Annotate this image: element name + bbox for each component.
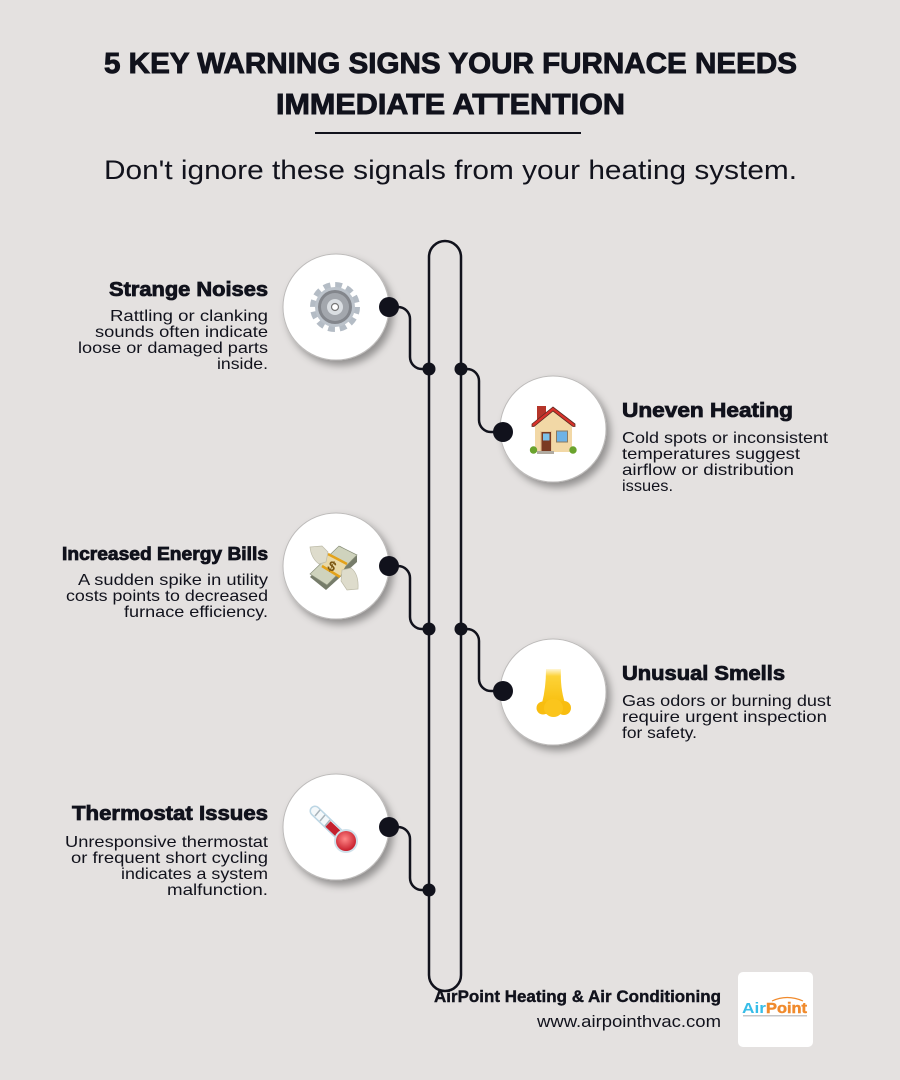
junction dot — [422, 884, 436, 896]
footer company name: AirPoint Heating & Air Conditioning — [434, 987, 721, 1006]
text: uneven heating description: airflow or distribution — [622, 462, 794, 479]
icon circle: thermometer — [283, 774, 389, 880]
logo — [738, 972, 813, 1047]
text: uneven heating description: temperatures suggest — [622, 446, 801, 463]
text: strange noises description — [78, 308, 268, 373]
text: uneven heating description: Cold spots or inconsistent — [622, 430, 829, 447]
junction dot — [454, 622, 468, 636]
logo: Air — [742, 1000, 766, 1017]
text: thermostat description: Unresponsive thermostat — [65, 834, 269, 851]
node dot — [379, 297, 399, 317]
logo: Point — [766, 1000, 807, 1017]
icon circle: gear — [283, 254, 389, 360]
text: strange noises description: Rattling or clanking — [110, 308, 268, 325]
footer website: www.airpointhvac.com — [536, 1013, 721, 1031]
heading: unusual smells: Unusual Smells — [622, 663, 785, 685]
title: 5 KEY WARNING SIGNS YOUR FURNACE NEEDS — [104, 48, 797, 80]
panel: thermostat issues — [65, 774, 436, 899]
heading: uneven heating: Uneven Heating — [622, 400, 793, 422]
node dot — [493, 681, 513, 701]
text: energy bills description — [66, 572, 268, 621]
text: thermostat description: or frequent short cycling — [71, 850, 268, 867]
connector: thermostat — [389, 827, 429, 890]
heading: thermostat issues: Thermostat Issues — [72, 803, 268, 825]
text: strange noises description: inside. — [217, 356, 268, 373]
text: uneven heating description: issues. — [622, 478, 673, 495]
junction dot — [422, 362, 436, 376]
heading: increased energy bills: Increased Energy Bills — [62, 544, 268, 564]
text: unusual smells description — [622, 693, 832, 742]
text: strange noises description: sounds often indicate — [95, 324, 268, 341]
text: uneven heating description — [622, 430, 829, 495]
text: unusual smells description: Gas odors or burning dust — [622, 693, 832, 710]
icon circle: house — [500, 376, 606, 482]
text: energy bills description: furnace efficiency. — [124, 604, 268, 621]
node dot — [493, 422, 513, 442]
node dot — [379, 817, 399, 837]
icon circle: money with wings — [283, 513, 389, 619]
timeline pill — [429, 241, 461, 991]
text: energy bills description: costs points to decreased — [66, 588, 268, 605]
text: unusual smells description: for safety. — [622, 725, 697, 742]
junction dot — [422, 622, 436, 636]
connector: strange noises — [389, 307, 429, 369]
text: thermostat description: malfunction. — [167, 882, 268, 899]
connector: unusual smells — [461, 629, 503, 691]
icon circle: money with wings: $ — [325, 557, 339, 575]
text: unusual smells description: require urgent inspection — [622, 709, 827, 726]
panel: strange noises — [78, 254, 436, 376]
text: energy bills description: A sudden spike in utility — [78, 572, 268, 589]
connector: energy bills — [389, 566, 429, 629]
text: thermostat description: indicates a system — [121, 866, 268, 883]
text: thermostat description — [65, 834, 269, 899]
node dot — [379, 556, 399, 576]
subtitle: Don't ignore these signals from your heating system. — [104, 155, 797, 185]
title — [104, 48, 797, 121]
heading: strange noises: Strange Noises — [109, 279, 268, 301]
icon circle: nose — [500, 639, 606, 745]
text: strange noises description: loose or damaged parts — [78, 340, 268, 357]
connector: uneven heating — [461, 369, 503, 432]
title: IMMEDIATE ATTENTION — [276, 89, 625, 121]
panel: unusual smells — [454, 622, 832, 745]
junction dot — [454, 362, 468, 376]
panel: uneven heating — [454, 362, 829, 495]
panel: increased energy bills — [62, 513, 436, 636]
